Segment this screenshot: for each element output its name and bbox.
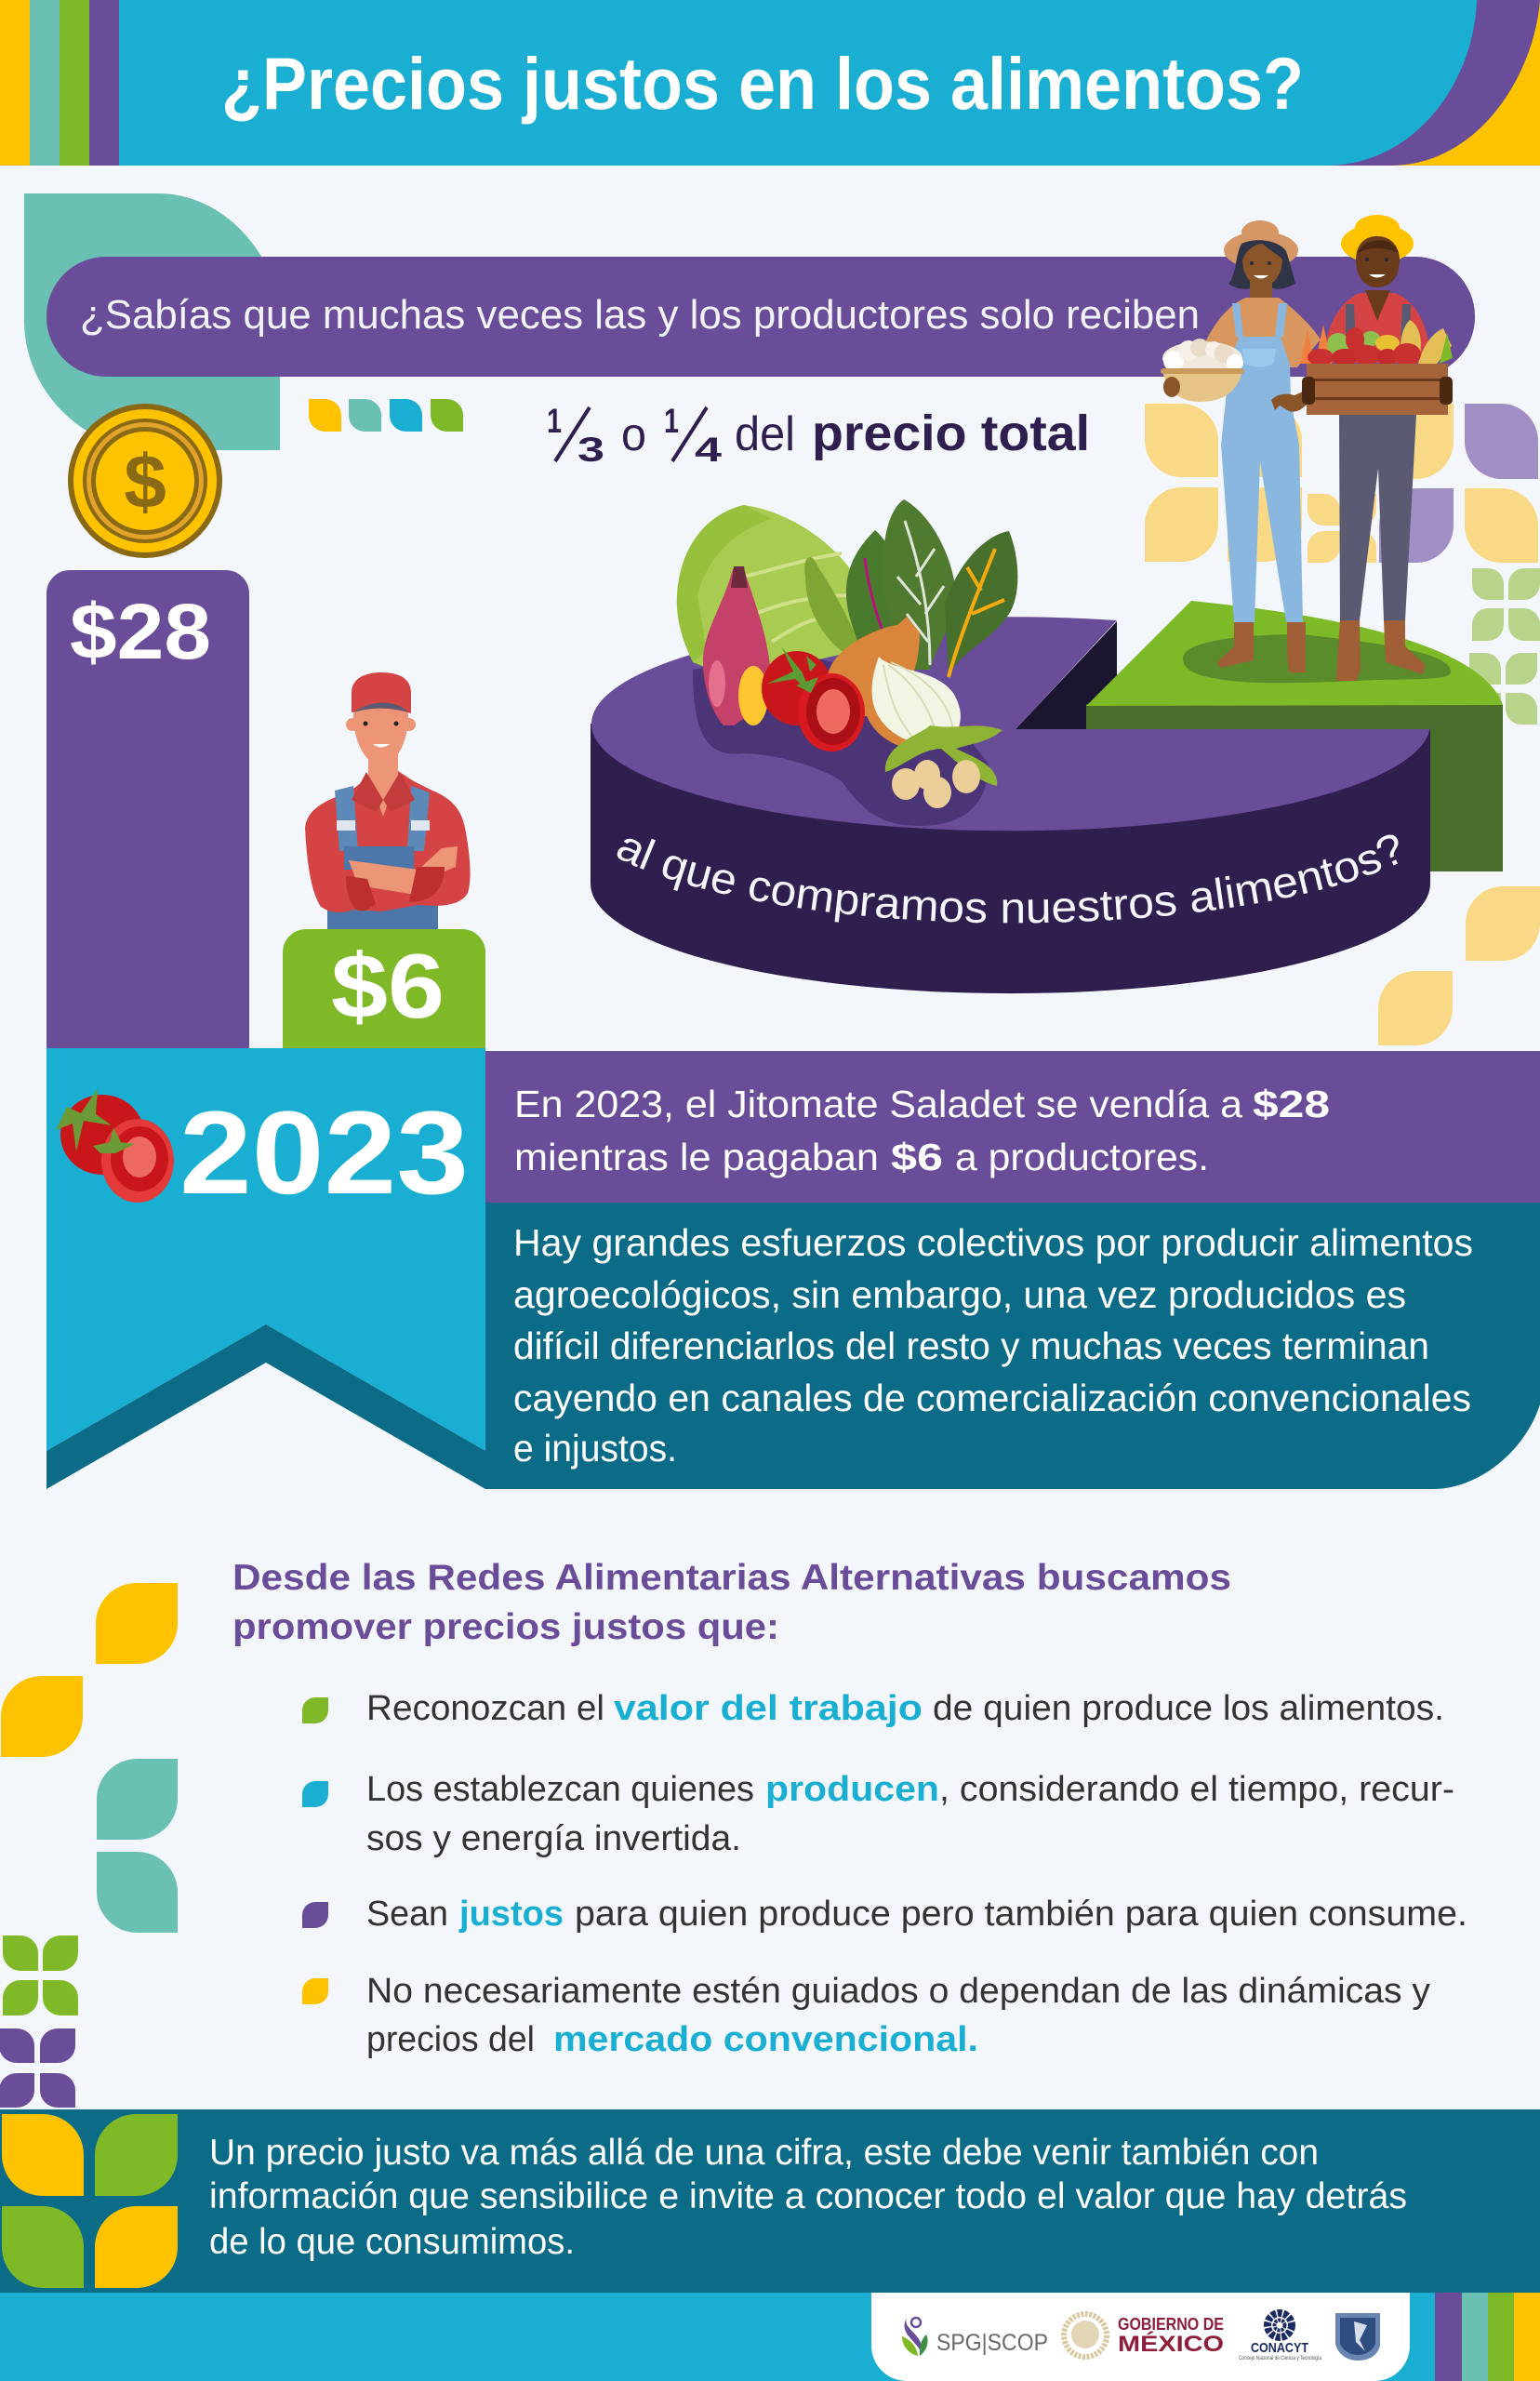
logo: CONACYT bbox=[1239, 2313, 1322, 2361]
ribbon: 2023: 2023 bbox=[179, 1086, 469, 1218]
bar: retail price bbox=[46, 570, 249, 1048]
panel: dark teal text block bbox=[485, 1203, 1540, 1489]
list item 4: mercado convencional. bbox=[553, 2020, 978, 2059]
panel: closing message: Un precio justo va más allá de una cifra, este debe venir también con bbox=[209, 2133, 1319, 2173]
fraction statement: precio total bbox=[812, 406, 1090, 461]
panel: closing message: de lo que consumimos. bbox=[209, 2222, 575, 2262]
pie slice: producers' share bbox=[1086, 601, 1503, 871]
pale leaves lower right bbox=[1378, 886, 1540, 1045]
ribbon: 2023 bbox=[46, 1048, 485, 1489]
logo: SPG SCOP: SPG|SCOP bbox=[936, 2330, 1048, 2356]
footer band bbox=[0, 2293, 1540, 2381]
panel: purple price statement: mientras le pagaban bbox=[514, 1136, 879, 1178]
bar: producer payment: $6 bbox=[331, 935, 445, 1037]
panel: purple price statement: En 2023, el Jitomate Saladet se vendía a bbox=[514, 1083, 1242, 1125]
bar: retail price: $28 bbox=[70, 588, 211, 675]
fraction statement: 1 bbox=[664, 402, 679, 440]
fraction statement: 4 bbox=[695, 431, 723, 469]
icon: coin bbox=[68, 404, 222, 558]
icon: woman producer bbox=[1161, 220, 1321, 672]
logo: CONACYT: Consejo Nacional de Ciencia y Tecnología bbox=[1239, 2356, 1322, 2361]
icon: man producer with crate bbox=[1300, 215, 1453, 681]
list item 4 bbox=[302, 1972, 1430, 2059]
fraction statement: 3 bbox=[578, 431, 604, 469]
logo: SPG SCOP bbox=[902, 2318, 1048, 2356]
list item 3: justos bbox=[458, 1895, 564, 1934]
logo: CONACYT: CONACYT bbox=[1251, 2340, 1308, 2356]
heading: alternative food networks: promover precios justos que: bbox=[232, 1607, 779, 1647]
list item 4: No necesariamente estén guiados o dependan de las dinámicas y bbox=[366, 1972, 1430, 2011]
list item 1 bbox=[302, 1689, 1444, 1728]
panel: purple price statement: $6 bbox=[891, 1136, 943, 1178]
question pill: ¿Sabías que muchas veces las y los productores solo reciben bbox=[80, 292, 1200, 338]
list item 2: Los establezcan quienes bbox=[366, 1770, 754, 1809]
egg basket bbox=[1161, 339, 1244, 402]
decorative teal leaf bbox=[24, 193, 280, 450]
logo: Gobierno de México: GOBIERNO DE bbox=[1118, 2315, 1224, 2334]
list item 4: precios del bbox=[366, 2020, 535, 2059]
chart: pie with removed green quarter: al que compramos nuestros alimentos? bbox=[617, 835, 1399, 923]
curved caption bbox=[614, 856, 1414, 923]
icon: tomatoes bbox=[56, 1088, 174, 1203]
left decorative leaves bbox=[0, 1583, 178, 2108]
list item 2: sos y energía invertida. bbox=[366, 1819, 741, 1858]
icon: farmer bbox=[305, 672, 471, 929]
icon: vegetables bbox=[677, 499, 1017, 826]
panel: dark teal text block: difícil diferenciarlos del resto y muchas veces terminan bbox=[513, 1324, 1429, 1367]
header banner bbox=[0, 0, 1540, 166]
list item 1: Reconozcan el bbox=[366, 1689, 604, 1728]
produce in crate bbox=[1300, 320, 1453, 366]
list item 1: de quien produce los alimentos. bbox=[933, 1689, 1444, 1728]
panel: purple price statement bbox=[485, 1051, 1540, 1203]
question pill bbox=[46, 257, 1475, 377]
panel: purple price statement: a productores. bbox=[955, 1136, 1209, 1178]
panel: dark teal text block: cayendo en canales de comercialización convencionales bbox=[513, 1377, 1471, 1419]
logo: UNAM bbox=[1335, 2313, 1380, 2361]
logo: Gobierno de México: MÉXICO bbox=[1118, 2331, 1224, 2357]
bar: producer payment bbox=[283, 929, 485, 1048]
panel: dark teal text block: agroecológicos, sin embargo, una vez producidos es bbox=[513, 1273, 1406, 1316]
chart: pie with removed green quarter bbox=[591, 601, 1503, 993]
list item 1: valor del trabajo bbox=[614, 1689, 923, 1728]
small colour leaves bbox=[309, 399, 463, 432]
heading: alternative food networks bbox=[232, 1558, 1231, 1647]
panel: dark teal text block: Hay grandes esfuerzos colectivos por producir alimentos bbox=[513, 1221, 1473, 1264]
list item 2 bbox=[302, 1770, 1454, 1858]
panel: closing message bbox=[0, 2109, 1540, 2293]
panel: closing message: información que sensibilice e invite a conocer todo el valor que hay detrás bbox=[209, 2176, 1407, 2216]
title: ¿Precios justos en los alimentos? bbox=[221, 42, 1304, 125]
fraction statement bbox=[547, 402, 1090, 469]
logo: Gobierno de México bbox=[1064, 2314, 1224, 2357]
heading: alternative food networks: Desde las Redes Alimentarias Alternativas buscamos bbox=[232, 1558, 1231, 1598]
list item 3: para quien produce pero también para quien consume. bbox=[575, 1895, 1467, 1934]
list item 2: producen bbox=[765, 1770, 939, 1809]
pale leaf pattern behind people bbox=[1145, 404, 1540, 725]
panel: dark teal text block: e injustos. bbox=[513, 1427, 677, 1470]
fraction statement: o bbox=[621, 408, 646, 460]
list item 2: , considerando el tiempo, recur- bbox=[939, 1770, 1454, 1809]
icon: coin: $ bbox=[124, 440, 166, 525]
panel: purple price statement: $28 bbox=[1253, 1083, 1330, 1125]
fraction statement: del bbox=[735, 407, 795, 461]
list item 3: Sean bbox=[366, 1895, 448, 1934]
fraction statement: 1 bbox=[547, 402, 562, 440]
panel: logos bbox=[871, 2293, 1410, 2381]
